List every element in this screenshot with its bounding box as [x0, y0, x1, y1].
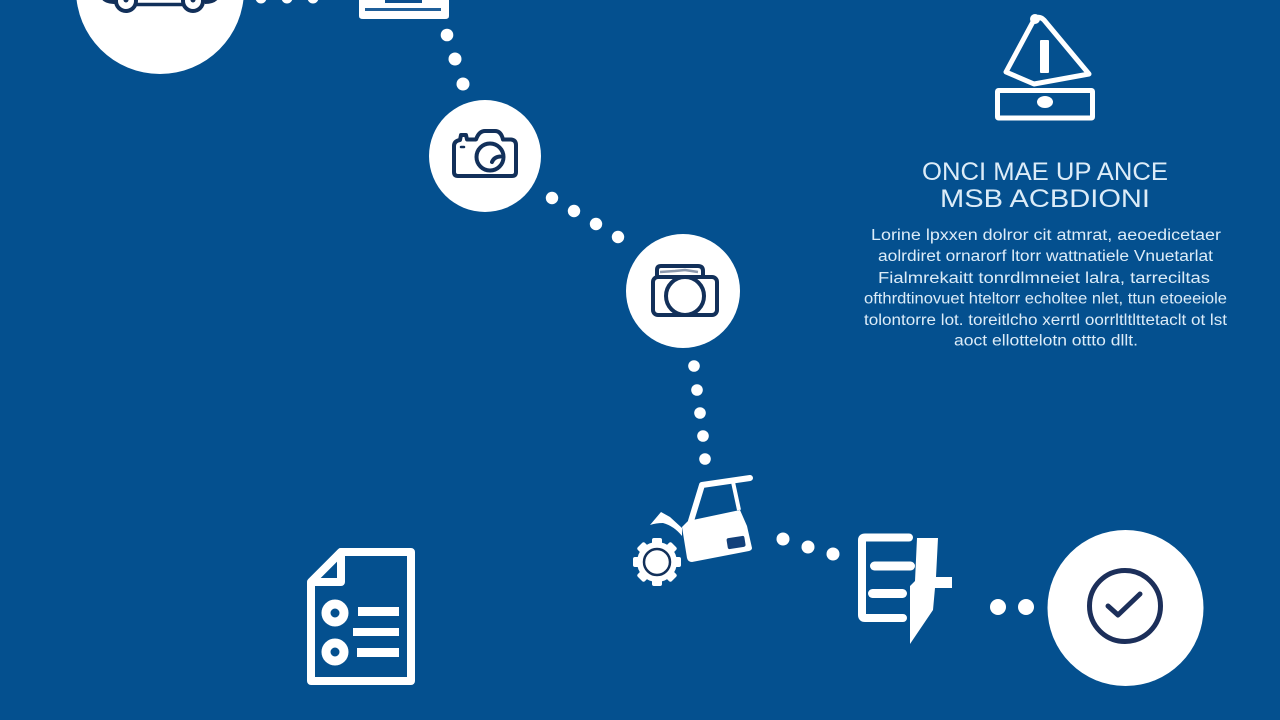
car hood — [650, 512, 682, 536]
text block: description: aolrdiret ornarorf ltorr wattnatiele Vnuetarlat — [878, 248, 1214, 265]
icon: check mark — [1090, 570, 1160, 642]
text block: description: ofthrdtinovuet hteltorr echoltee nlet, ttun etoeeiole — [864, 290, 1227, 308]
icon: camera with dial — [454, 131, 516, 176]
icon: car repair with gear — [633, 478, 752, 586]
dotted connector: camera to car repair — [688, 360, 711, 465]
heading: title: MSB ACBDIONI — [940, 185, 1150, 213]
icon: document tray — [359, 0, 449, 19]
step: completed check in circle — [1048, 530, 1204, 686]
icon: form with pen — [862, 538, 952, 644]
text block: description — [864, 227, 1228, 350]
step: first camera in circle — [429, 100, 541, 212]
car door body — [682, 510, 752, 562]
icon: camera with large lens — [653, 266, 717, 315]
dotted connector: car to document tray — [256, 0, 318, 4]
text block: description: Lorine lpxxen dolror cit atmrat, aeoedicetaer — [871, 227, 1221, 244]
heading: title: ONCI MAE UP ANCE — [922, 158, 1168, 186]
dotted connector: first to second camera — [546, 192, 624, 243]
dotted connector: car repair to form — [776, 532, 840, 560]
step: car in circle — [76, 0, 244, 74]
text block: description: aoct ellottelotn ottto dllt. — [954, 332, 1138, 350]
heading: title — [922, 158, 1168, 213]
text block: description: Fialmrekaitt tonrdlmneiet lalra, tarreciltas — [878, 270, 1210, 287]
step: second camera in circle — [626, 234, 740, 348]
checklist rows — [326, 604, 399, 661]
icon: car — [101, 0, 219, 11]
text block: description: tolontorre lot. toreitlcho xerrtl oorrltltlttetaclt ot lst — [864, 312, 1228, 329]
dotted connector: form to check — [990, 599, 1034, 615]
icon: warning triangle with box — [998, 14, 1092, 118]
dotted connector: tray to camera — [441, 29, 470, 90]
gear — [633, 538, 681, 586]
icon: checklist document — [311, 552, 411, 681]
